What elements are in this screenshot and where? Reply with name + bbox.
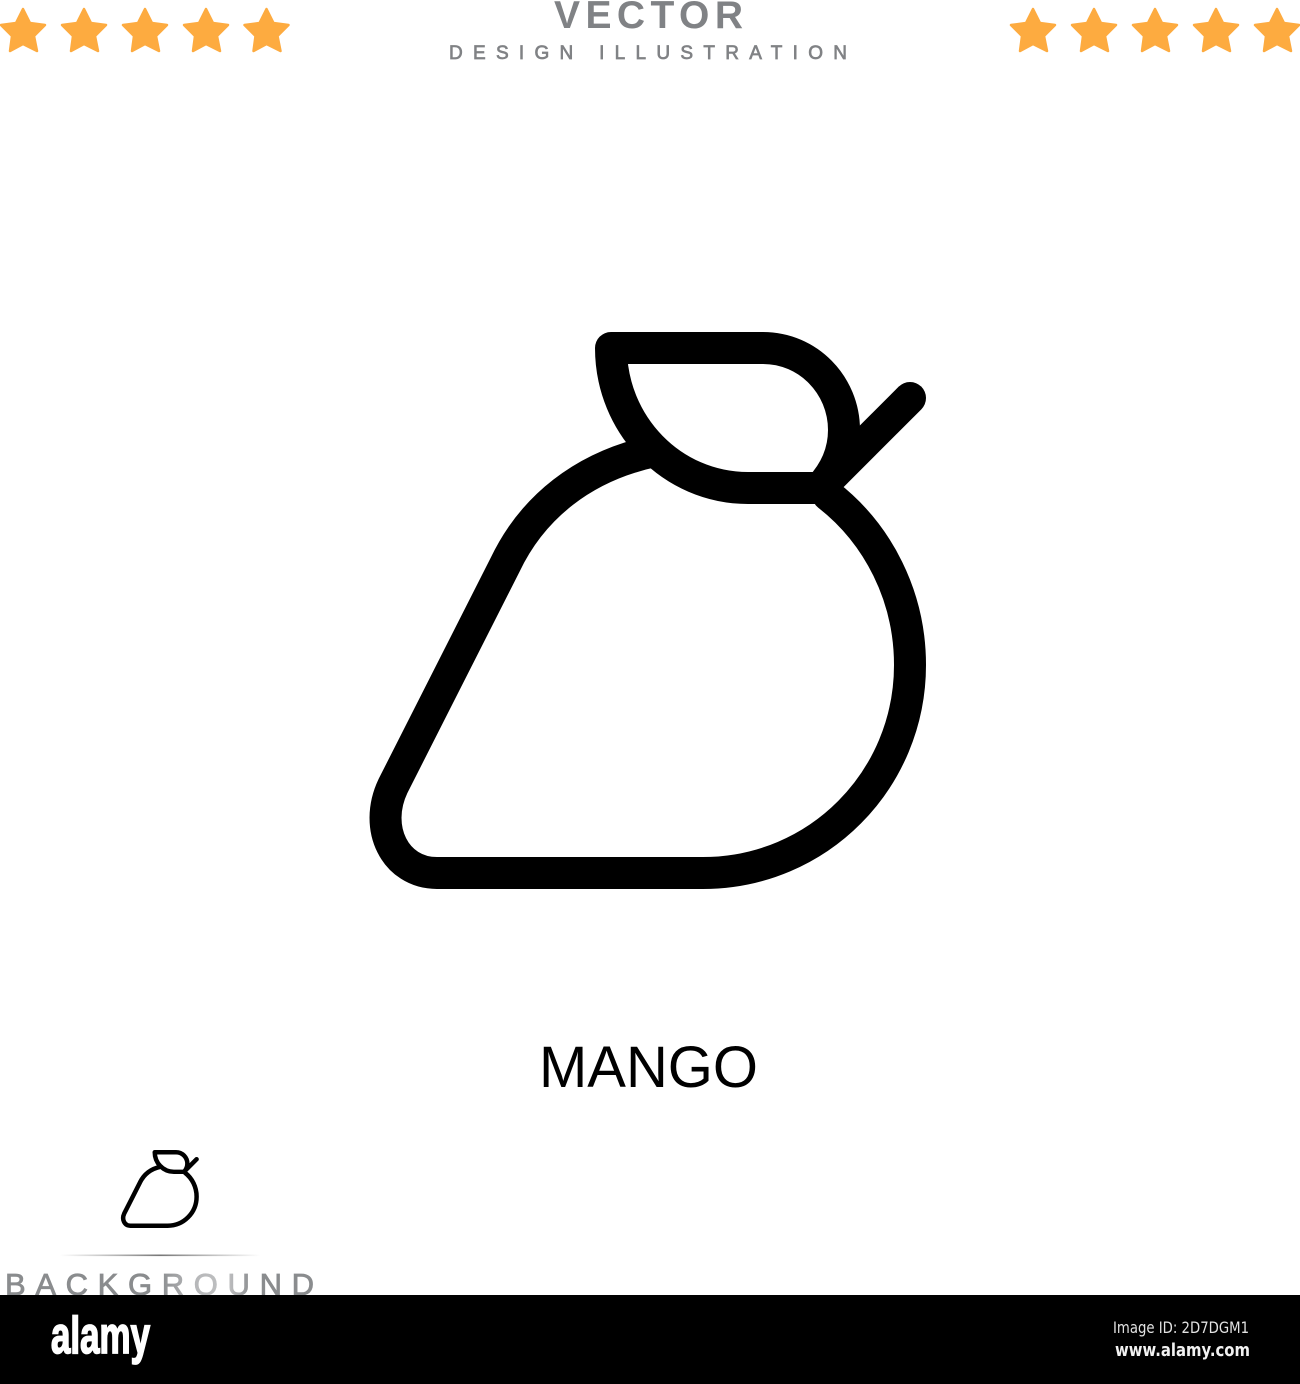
mango leaf [611, 348, 844, 488]
mango body [386, 451, 910, 873]
right star rating [1011, 9, 1299, 51]
icon: small mango [123, 1152, 197, 1226]
mango stem [822, 398, 910, 486]
icon: large mango [386, 348, 910, 873]
website: www.alamy.com [1115, 1340, 1250, 1361]
left star rating [1, 9, 288, 51]
header subtitle: DESIGN ILLUSTRATION [449, 43, 847, 64]
image id: Image ID: 2D7DGM1 [1113, 1318, 1249, 1337]
watermark footer bar [0, 1295, 1300, 1384]
background caption: BACKGROUND [5, 1267, 314, 1302]
icon label: MANGO [539, 1035, 758, 1100]
alamy logo: alamy [51, 1307, 150, 1365]
